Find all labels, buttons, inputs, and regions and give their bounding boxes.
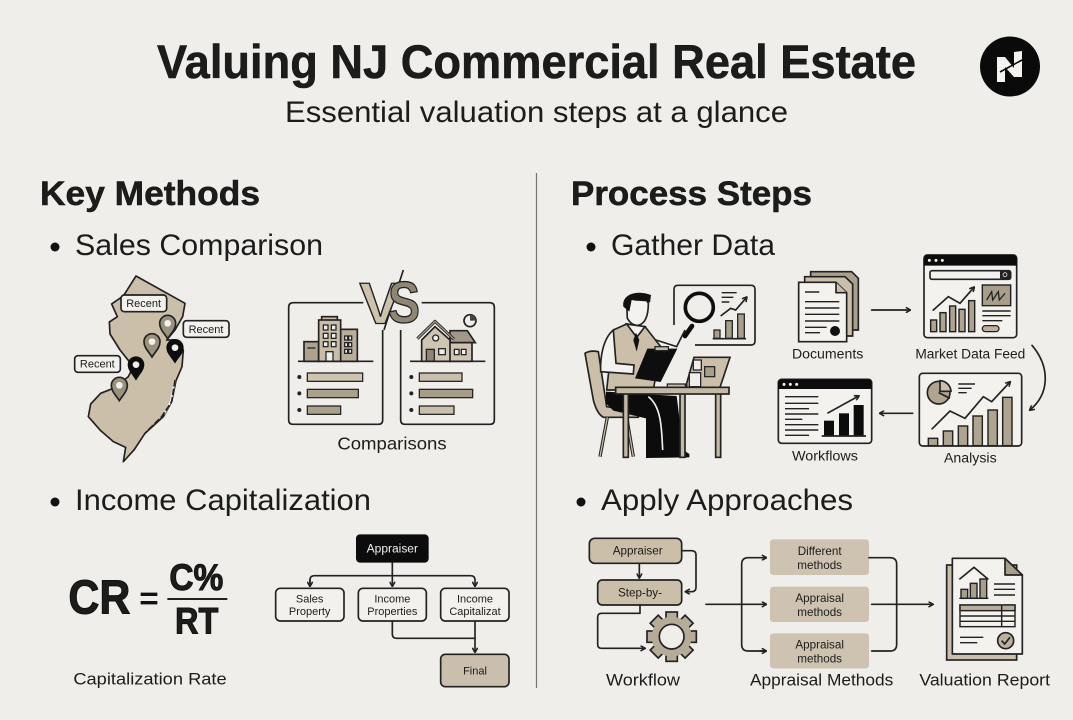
node: sales property: Sales xyxy=(296,593,324,605)
window: workflows xyxy=(778,379,872,443)
box: different methods xyxy=(770,539,869,575)
node: final xyxy=(441,654,509,687)
node: final: Final xyxy=(463,665,487,677)
node: sales property: Property xyxy=(289,606,331,618)
magnifier xyxy=(685,293,713,336)
arrow: analysis to workflows xyxy=(880,411,913,416)
node: income properties xyxy=(358,588,426,621)
node: income capitalizat: Capitalizat xyxy=(449,606,501,618)
box: appraisal methods 2: Appraisal xyxy=(795,639,844,652)
bullet heading: income capitalization: Income Capitalization xyxy=(75,484,371,517)
label: recent east: Recent xyxy=(189,324,223,336)
node: step-by-: Step-by- xyxy=(618,587,662,600)
formula: capitalization rate: RT xyxy=(175,600,218,641)
arrow: appraiser to step xyxy=(637,563,642,578)
illustration: analyst at desk xyxy=(585,285,755,458)
connectors xyxy=(310,563,475,652)
arrow: documents to market data xyxy=(872,307,910,312)
card: residential house xyxy=(401,303,494,424)
formula: capitalization rate: CR xyxy=(68,570,130,624)
chair xyxy=(585,351,638,417)
box: different methods: methods xyxy=(797,559,842,572)
label: recent north xyxy=(121,295,167,312)
title: Valuing NJ Commercial Real Estate xyxy=(157,35,916,88)
node: appraiser: Appraiser xyxy=(367,541,418,555)
pin: gray middle xyxy=(144,334,160,357)
panel: gather data graphics xyxy=(585,255,1045,466)
label: recent west xyxy=(75,356,120,372)
heading: process steps: Process Steps xyxy=(571,175,812,213)
laptop and items xyxy=(667,357,730,387)
pin: black centre xyxy=(128,356,144,381)
caption: capitalization rate: Capitalization Rate xyxy=(73,670,227,689)
chart card xyxy=(674,285,755,345)
bullet heading: sales comparison: Sales Comparison xyxy=(75,229,323,262)
panel: sales comparison graphics xyxy=(75,270,494,462)
connectors: out of methods xyxy=(869,558,933,651)
VS badge xyxy=(359,270,420,336)
node: income properties: Properties xyxy=(367,606,418,618)
label: workflows: Workflows xyxy=(792,449,858,464)
comparison cards xyxy=(289,270,494,453)
desk xyxy=(616,387,729,457)
method boxes xyxy=(770,539,869,668)
pin: gray north xyxy=(160,315,176,339)
node: income capitalizat xyxy=(441,588,509,621)
label: documents: Documents xyxy=(792,347,863,362)
label: workflow: Workflow xyxy=(606,671,681,690)
formula: capitalization rate xyxy=(68,557,227,641)
torso xyxy=(607,324,661,390)
arrow: loop to gear xyxy=(598,605,645,648)
label: appraisal methods: Appraisal Methods xyxy=(750,671,893,690)
map: New Jersey with pins xyxy=(75,276,229,462)
flowchart: appraiser xyxy=(276,534,509,687)
box: appraisal methods 1: Appraisal xyxy=(795,592,844,605)
workflow diagram xyxy=(589,538,696,661)
clipboard xyxy=(635,349,677,382)
pin: gray south xyxy=(111,377,127,401)
node: appraiser xyxy=(356,534,429,563)
box: appraisal methods 2: methods xyxy=(797,652,842,665)
box: appraisal methods 1 xyxy=(770,587,869,622)
trousers xyxy=(606,392,689,458)
VS badge: S xyxy=(388,271,420,336)
caption: comparisons: Comparisons xyxy=(337,433,447,453)
label: market data feed: Market Data Feed xyxy=(915,346,1025,361)
label: recent east xyxy=(183,321,229,337)
icon: gear xyxy=(647,612,696,661)
bullet heading: gather data: Gather Data xyxy=(611,229,775,262)
node: income capitalizat: Income xyxy=(457,593,493,605)
box: appraisal methods 2 xyxy=(770,633,869,668)
icon: valuation report xyxy=(947,558,1022,660)
icon: logo xyxy=(980,36,1040,96)
node: sales property xyxy=(276,588,344,621)
node: appraiser: Appraiser xyxy=(613,545,663,558)
connectors: into methods xyxy=(706,558,766,651)
head xyxy=(627,297,648,325)
label: recent west: Recent xyxy=(80,359,115,371)
label: recent north: Recent xyxy=(126,298,161,310)
card: commercial building xyxy=(289,303,383,424)
icon: documents xyxy=(799,272,858,342)
VS badge: V xyxy=(359,271,401,336)
subtitle: Essential valuation steps at a glance xyxy=(285,96,788,129)
bullet heading: apply approaches: Apply Approaches xyxy=(601,484,853,517)
formula: capitalization rate: C% xyxy=(169,557,223,598)
box: appraisal methods 1: methods xyxy=(797,606,842,619)
window: analysis xyxy=(919,373,1022,446)
pin: black east xyxy=(166,339,184,364)
label: analysis: Analysis xyxy=(944,451,997,466)
box: different methods: Different xyxy=(798,545,842,558)
panel: income capitalization graphics xyxy=(68,534,509,689)
node: income properties: Income xyxy=(374,593,410,605)
window: market data feed xyxy=(924,255,1017,338)
panel: apply approaches graphics xyxy=(589,538,1050,690)
arrow: market data to analysis xyxy=(1030,345,1045,410)
arrow: loop right xyxy=(682,551,696,592)
heading: key methods: Key Methods xyxy=(40,175,260,213)
label: valuation report: Valuation Report xyxy=(919,671,1050,690)
